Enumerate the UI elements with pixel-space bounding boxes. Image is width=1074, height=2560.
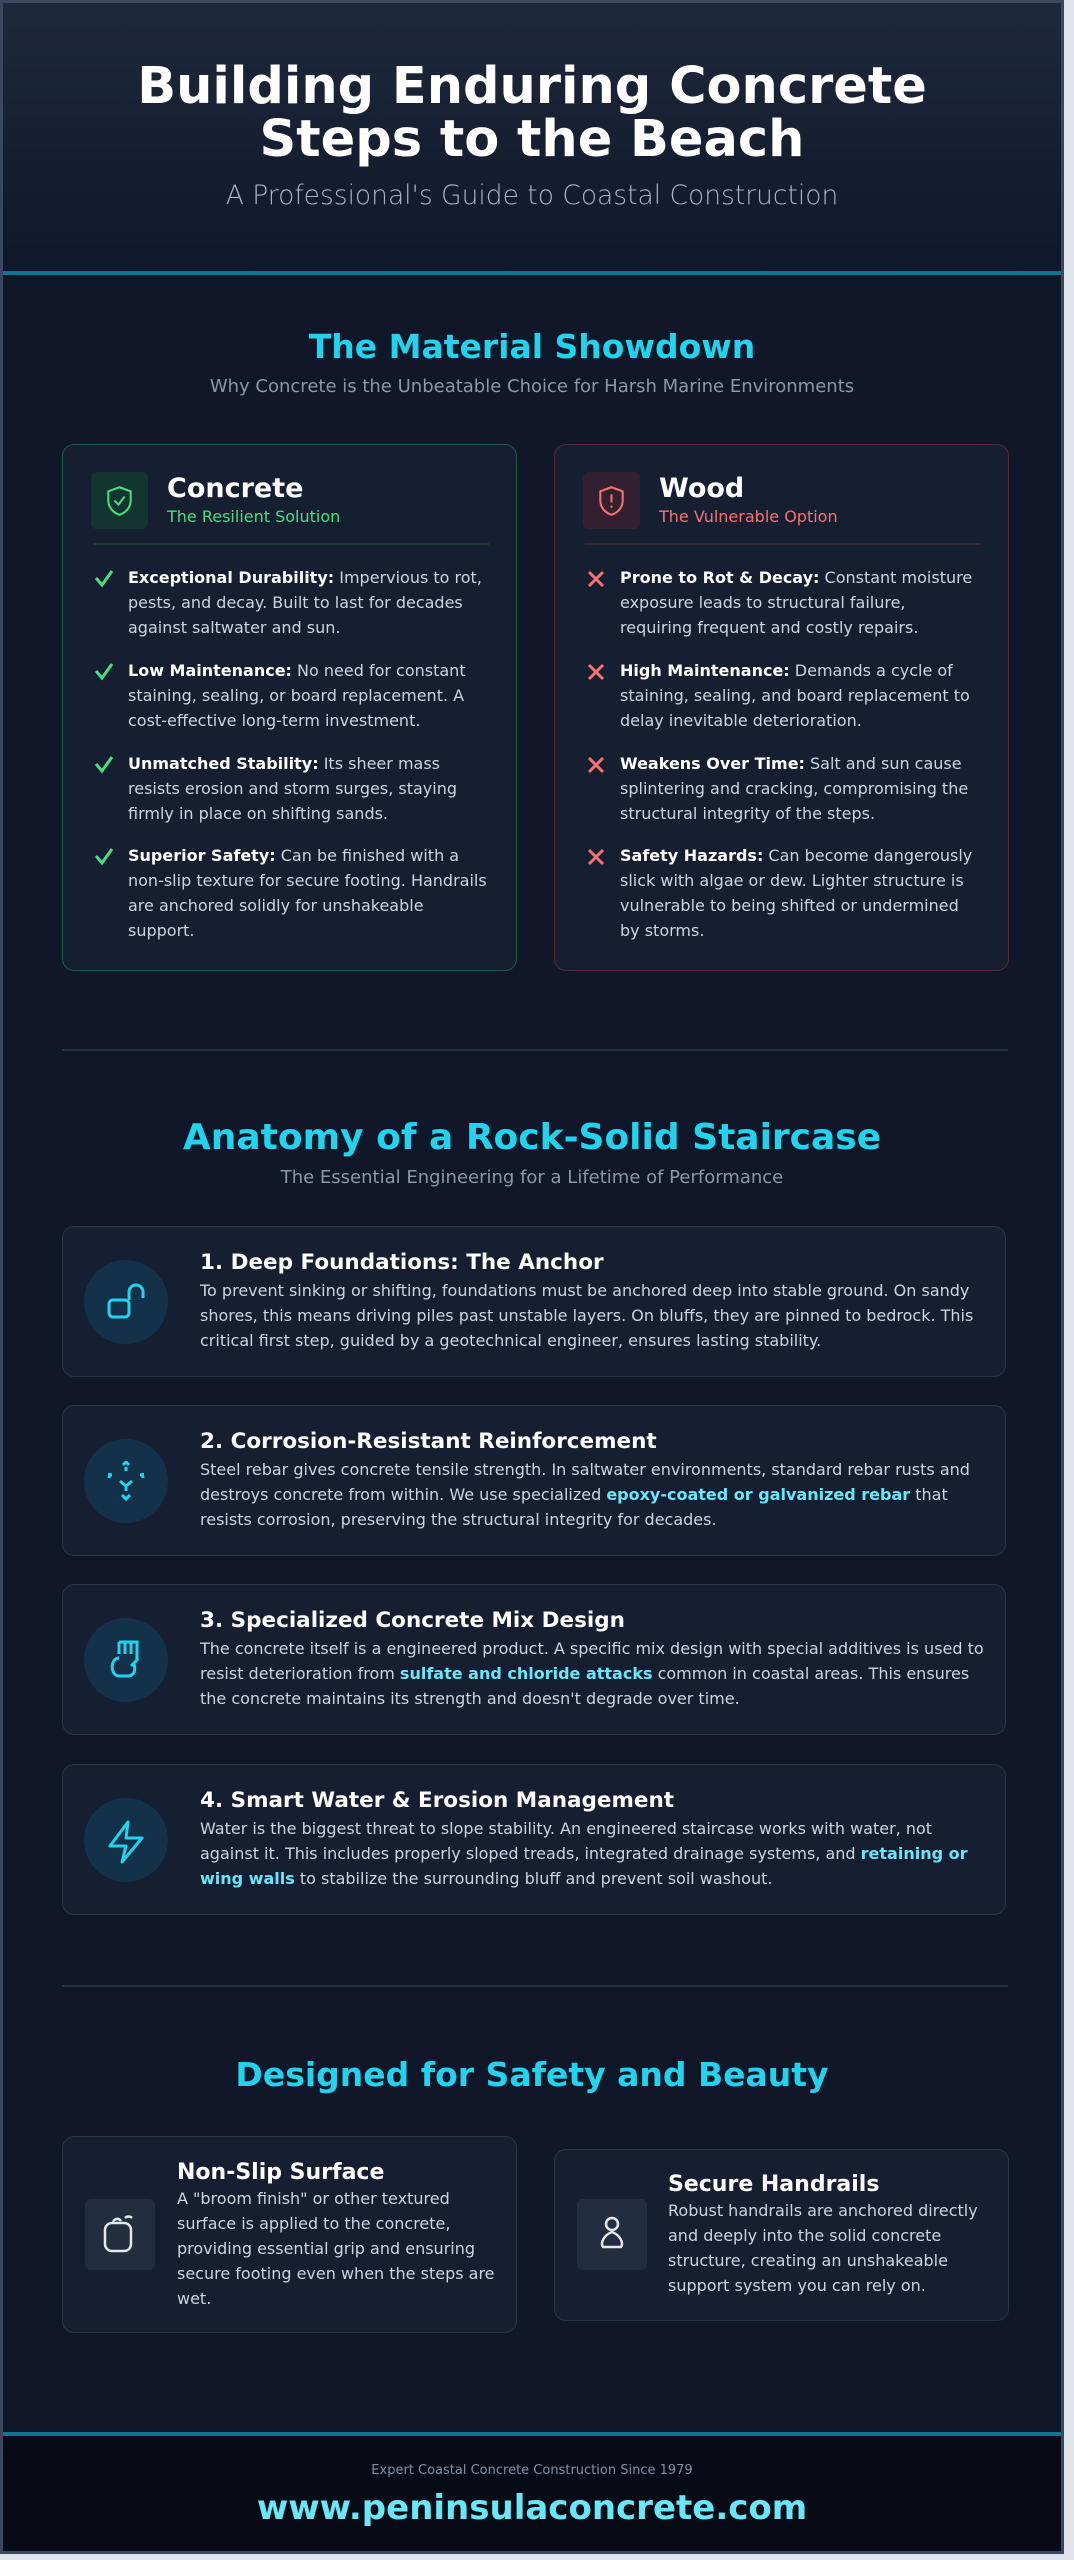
wood item 2: High Maintenance: Demands a cycle of staining, sealing, and board replacement to delay inevitable deterioration. <box>620 661 970 730</box>
icon: person <box>577 2199 647 2270</box>
panel: wood <box>554 444 1009 971</box>
footer <box>3 2436 1061 2556</box>
panel: water management: Water is the biggest threat to slope stability. An engineered staircase works with water, not against it. This includes properly sloped treads, integrated drainage systems, and retaining or wing walls to stabilize the surrounding bluff and prevent soil washout. <box>200 1819 967 1888</box>
non-slip title: Non-Slip Surface <box>177 2160 384 2185</box>
panel: deep foundations <box>62 1226 1006 1377</box>
title: Steps to the Beach <box>260 110 804 169</box>
panel: mix design: 3. Specialized Concrete Mix Design <box>200 1608 625 1633</box>
heading: anatomy: Anatomy of a Rock-Solid Staircase <box>183 1117 881 1158</box>
concrete item 1: Exceptional Durability: Impervious to rot, pests, and decay. Built to last for decades against saltwater and sun. <box>128 568 482 637</box>
wood title: Wood <box>659 473 744 504</box>
panel: deep foundations: 1. Deep Foundations: The Anchor <box>200 1250 604 1275</box>
panel: concrete <box>62 444 517 971</box>
subtitle: A Professional's Guide to Coastal Construction <box>226 180 838 211</box>
panel: reinforcement <box>62 1405 1006 1556</box>
footer url: www.peninsulaconcrete.com <box>257 2488 807 2528</box>
subheading: material showdown: Why Concrete is the Unbeatable Choice for Harsh Marine Environments <box>210 376 854 397</box>
title <box>137 57 927 169</box>
header <box>3 3 1061 273</box>
wood item 4: Safety Hazards: Can become dangerously slick with algae or dew. Lighter structure is vulnerable to being shifted or undermined by storms. <box>620 846 972 940</box>
wood subtitle: The Vulnerable Option <box>659 507 838 526</box>
panel: water management: 4. Smart Water & Erosion Management <box>200 1788 674 1813</box>
title: Building Enduring Concrete <box>137 57 927 116</box>
panel: reinforcement: 2. Corrosion-Resistant Reinforcement <box>200 1429 657 1454</box>
icon: mixer <box>84 1618 168 1702</box>
concrete item 2: Low Maintenance: No need for constant staining, sealing, or board replacement. A cost-effective long-term investment. <box>128 661 466 730</box>
panel: non-slip surface <box>62 2136 517 2333</box>
heading: material showdown: The Material Showdown <box>309 327 755 366</box>
concrete title: Concrete <box>167 473 303 504</box>
panel: mix design: The concrete itself is a engineered product. A specific mix design with special additives is used to resist deterioration from sulfate and chloride attacks common in coastal areas. This ensures the concrete maintains its strength and doesn't degrade over time. <box>200 1639 984 1708</box>
panel: water management <box>62 1764 1006 1915</box>
panel: deep foundations: To prevent sinking or shifting, foundations must be anchored deep into stable ground. On sandy shores, this means driving piles past unstable layers. On bluffs, they are pinned to bedrock. This critical first step, guided by a geotechnical engineer, ensures lasting stability. <box>200 1281 973 1350</box>
concrete item 3: Unmatched Stability: Its sheer mass resists erosion and storm surges, staying firmly in place on shifting sands. <box>128 754 457 823</box>
panel: reinforcement: Steel rebar gives concrete tensile strength. In saltwater environments, standard rebar rusts and destroys concrete from within. We use specialized epoxy-coated or galvanized rebar that resists corrosion, preserving the structural integrity for decades. <box>200 1460 970 1529</box>
concrete item 4: Superior Safety: Can be finished with a non-slip texture for secure footing. Handrails are anchored solidly for unshakeable support. <box>128 846 487 940</box>
heading: safety and beauty: Designed for Safety and Beauty <box>235 2055 829 2094</box>
concrete subtitle: The Resilient Solution <box>167 507 340 526</box>
wood item 1: Prone to Rot & Decay: Constant moisture exposure leads to structural failure, requiring frequent and costly repairs. <box>620 568 972 637</box>
handrails text: Robust handrails are anchored directly and deeply into the solid concrete structure, creating an unshakeable support system you can rely on. <box>668 2201 978 2295</box>
footer tagline: Expert Coastal Concrete Construction Since 1979 <box>371 2463 693 2478</box>
panel: secure handrails <box>554 2149 1009 2321</box>
icon: shield alert <box>583 472 640 529</box>
icon: lightning <box>84 1798 168 1882</box>
handrails title: Secure Handrails <box>668 2172 879 2197</box>
icon: surface <box>85 2199 155 2270</box>
panel: mix design <box>62 1584 1006 1735</box>
icon: arrows <box>84 1439 168 1523</box>
subheading: anatomy: The Essential Engineering for a Lifetime of Performance <box>281 1167 783 1188</box>
icon: shield check <box>91 472 148 529</box>
non-slip text: A "broom finish" or other textured surface is applied to the concrete, providing essential grip and ensuring secure footing even when the steps are wet. <box>177 2189 495 2308</box>
icon: unlock <box>84 1260 168 1344</box>
wood item 3: Weakens Over Time: Salt and sun cause splintering and cracking, compromising the structural integrity of the steps. <box>620 754 968 823</box>
